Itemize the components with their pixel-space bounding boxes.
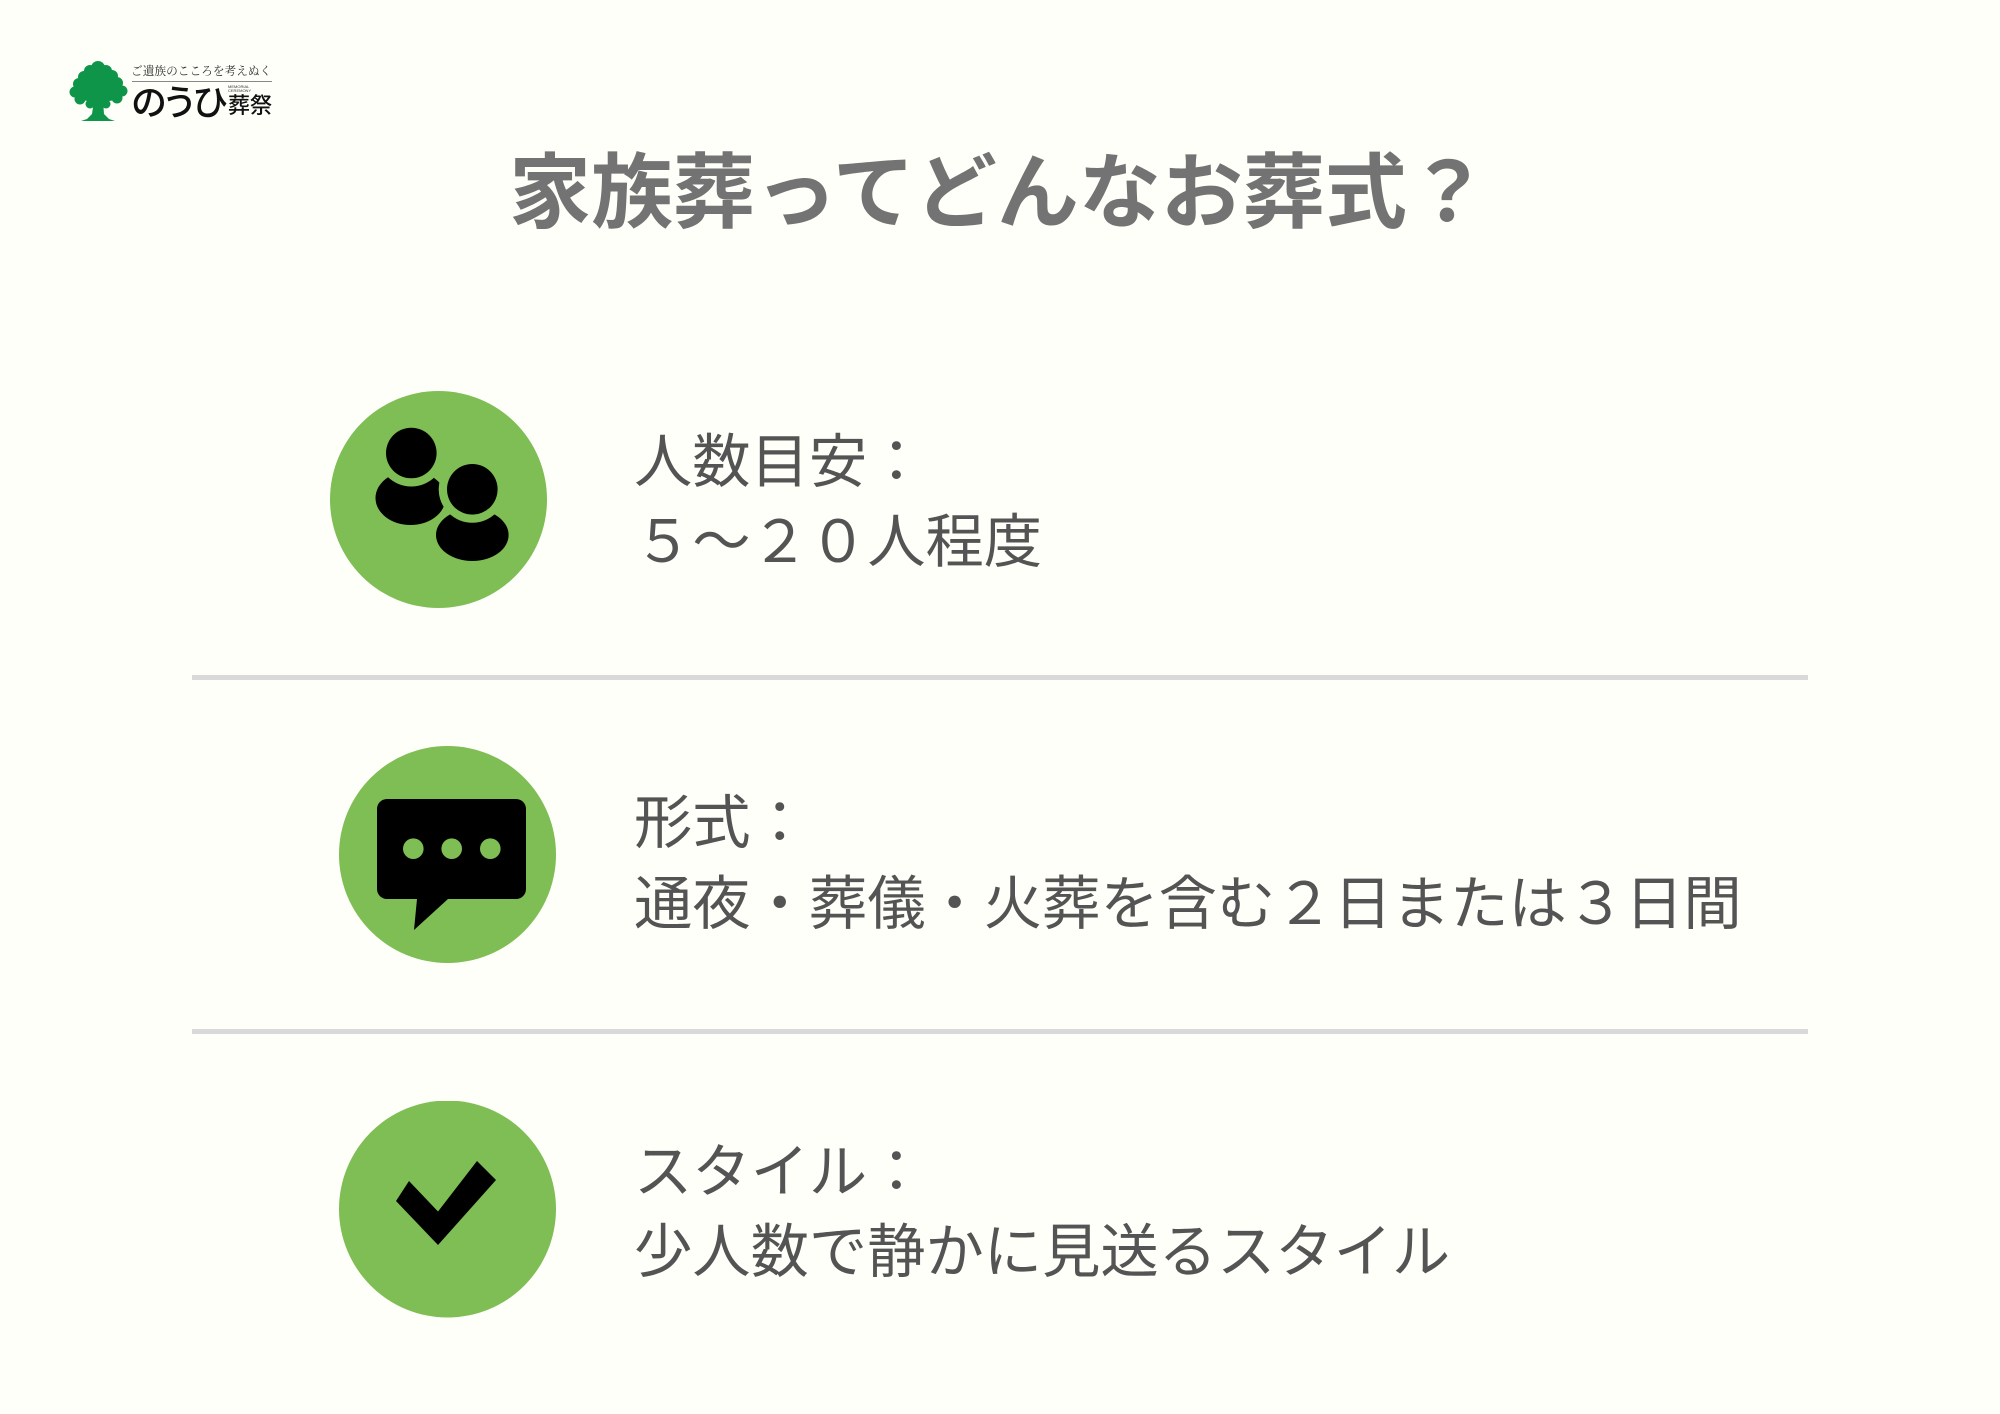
divider 2	[192, 1029, 1808, 1034]
logo: のうひ葬祭	[70, 61, 272, 123]
icon: check mark	[339, 1101, 556, 1318]
icon: green tree	[70, 61, 128, 121]
text: number of people: 人数目安：	[634, 430, 926, 495]
icon: people	[330, 391, 547, 608]
logo tagline: ご遺族のこころを考えぬく	[131, 65, 271, 78]
text: format: 形式：	[634, 791, 809, 856]
logo name: のうひ	[131, 82, 223, 123]
divider 1	[192, 675, 1808, 680]
logo english text	[228, 84, 251, 93]
title: 家族葬ってどんなお葬式？	[509, 148, 1489, 239]
text: small-group farewell: 少人数で静かに見送るスタイル	[634, 1220, 1450, 1285]
text: schedule: 通夜・葬儀・火葬を含む２日または３日間	[634, 872, 1742, 937]
panel: format	[339, 746, 1742, 963]
logo english text: MEMORIAL	[228, 84, 249, 89]
text: style: スタイル：	[634, 1140, 926, 1205]
logo english text: CEREMONY	[228, 88, 251, 93]
panel: style	[339, 1101, 1450, 1318]
panel: number of people	[330, 391, 1042, 608]
icon: speech bubble	[339, 746, 556, 963]
text: 5-20 people: ５～２０人程度	[634, 510, 1042, 575]
logo subtitle: 葬祭	[228, 93, 272, 118]
